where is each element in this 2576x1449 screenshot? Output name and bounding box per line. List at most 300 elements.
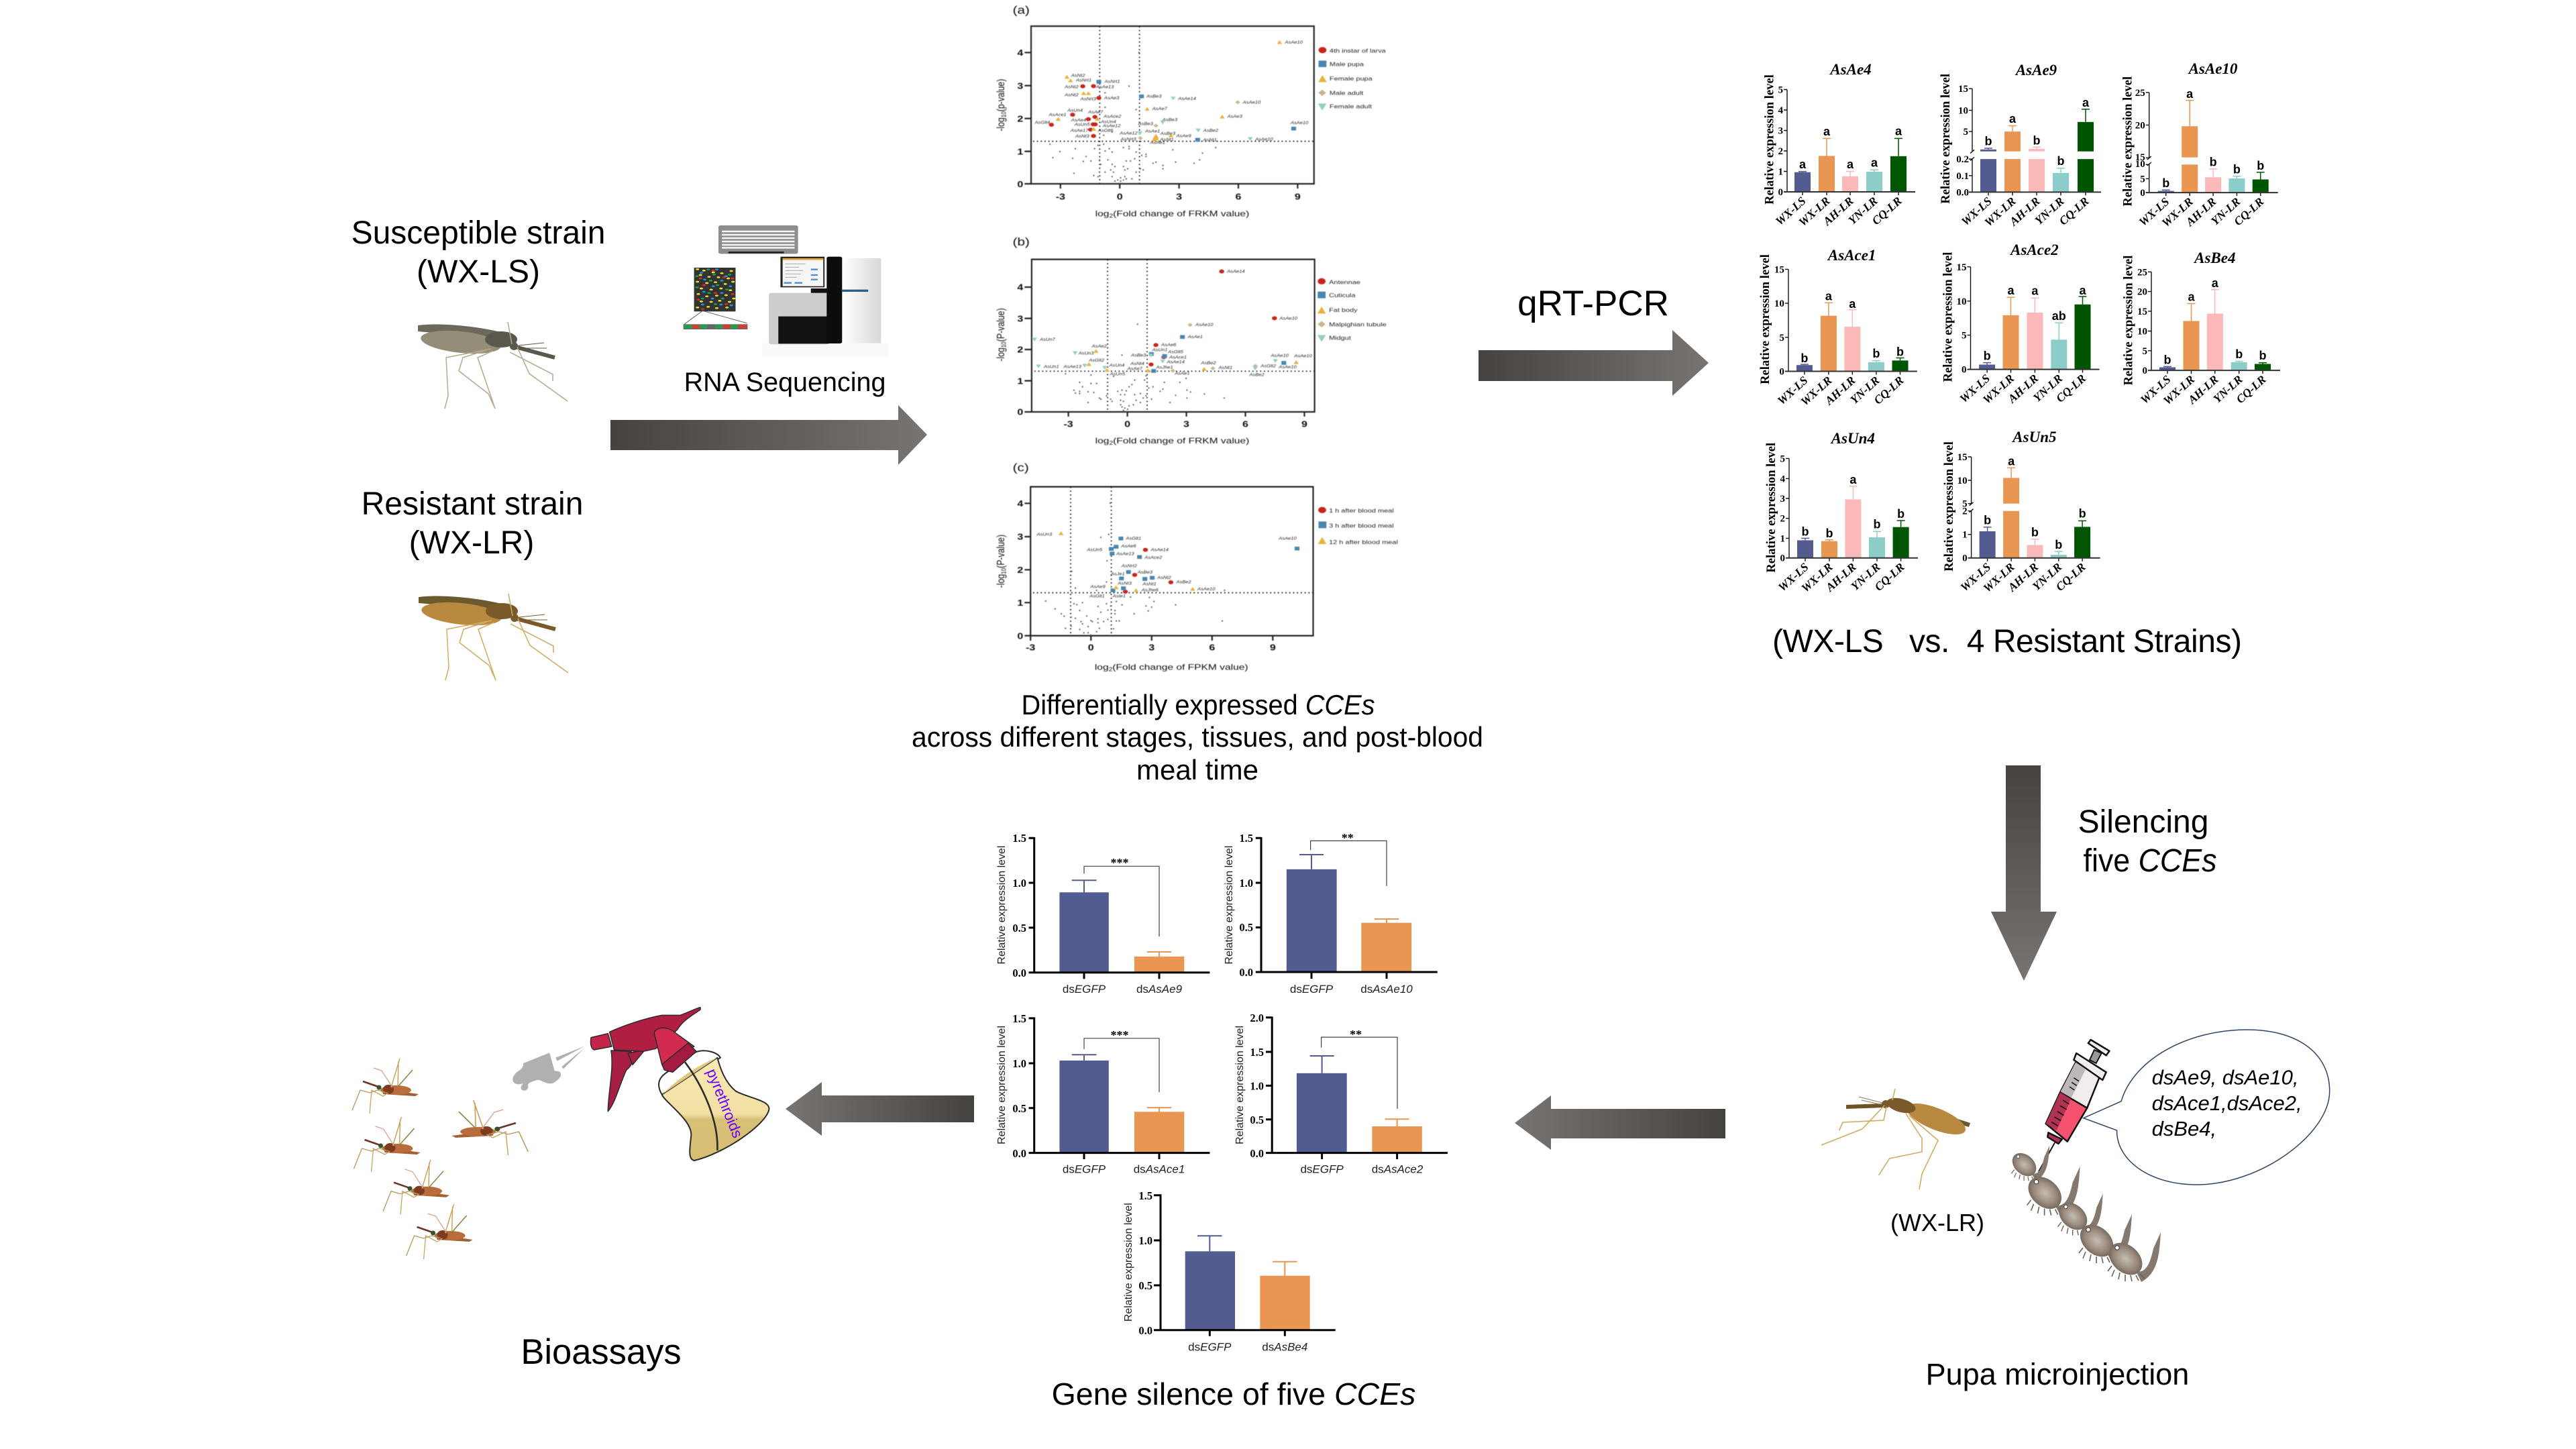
chart: AsUn5: AsUn5 [2011, 429, 2057, 445]
chart: AsUn5: WX-LR [1980, 560, 2017, 595]
label: gene silence of five CCEs: Gene silence of five CCEs [1052, 1377, 1415, 1411]
gene labels: AsAe13 [1116, 552, 1134, 556]
chart: AsUn4: AsUn4 [1830, 430, 1875, 447]
chart: AsUn5 [1942, 429, 2100, 595]
plot frame and axes: log [1095, 662, 1109, 672]
chart: AsAe10: AsAe10 [2188, 60, 2238, 77]
chart: AsAce1 [1758, 247, 1917, 409]
gene labels: AsNt2 [1064, 85, 1079, 89]
chart: AsUn5: Relative expression level [1942, 441, 1956, 572]
chart: AsUn5: 0 [1962, 553, 1968, 564]
chart: AsAe4: a [1823, 125, 1831, 138]
plot frame and axes: -3 [1026, 643, 1035, 653]
chart: dsAsBe4 silencing: dsEGFP [1188, 1340, 1232, 1353]
chart: AsAce1: a [1825, 290, 1833, 303]
chart: AsAce2: a [2031, 284, 2039, 298]
gene labels: AsNrt1 [1075, 78, 1091, 83]
chart: dsAsAce1 silencing [996, 1012, 1210, 1176]
chart: dsAsAce1 silencing: 0.5 [1012, 1102, 1026, 1115]
gene labels: AsNrt3 [1080, 97, 1096, 101]
gene labels [1034, 41, 1309, 145]
gene labels: AsAe9 [1175, 134, 1191, 138]
label: pupa microinjection: Pupa microinjection [1926, 1357, 2189, 1391]
chart: AsAce1: 10 [1774, 299, 1784, 309]
chart: AsAce2: 5 [1962, 331, 1967, 341]
heading: susceptible strain [352, 215, 605, 290]
chart: AsUn4: WX-LS [1776, 560, 1811, 594]
chart: AsAce1: 15 [1774, 264, 1784, 275]
gene labels: AsAe10 [1254, 138, 1273, 142]
chart: AsAe10: AH-LR [2183, 195, 2218, 229]
chart: AsBe4: 10 [2137, 326, 2147, 337]
chart: AsAe4: 3 [1778, 126, 1783, 137]
chart: AsAce2 [1941, 241, 2100, 407]
chart: AsAe4: AsAe4 [1829, 61, 1872, 78]
heading: susceptible strain: (WX-LS) [417, 254, 540, 290]
plot frame and axes: 3 [1183, 420, 1189, 429]
gene labels: AsGlt2 [1088, 359, 1104, 363]
gene labels: AsNrt2 [1121, 564, 1137, 568]
plot frame and axes [995, 26, 1314, 219]
gene labels: AsAe10 [1195, 323, 1214, 327]
chart: dsAsBe4 silencing: 0.5 [1138, 1279, 1152, 1292]
chart: AsAce2: AsAce2 [2009, 241, 2059, 258]
legend b: Malpighian tubule [1329, 322, 1387, 328]
legend c: 3 h after blood meal [1329, 523, 1394, 529]
plot frame and axes: 2 [1109, 440, 1113, 446]
plot frame and axes: 4 [1017, 499, 1023, 509]
arrow: microinjection to gene silence [1515, 1095, 1725, 1150]
gene labels: AsBe2 [1203, 129, 1218, 133]
gene labels: AsAe4 [1071, 119, 1086, 123]
chart: AsAe10: 0 [2140, 188, 2145, 199]
chart: AsAe4: 4 [1778, 105, 1783, 116]
heading: resistant strain: Resistant strain [362, 486, 583, 522]
gene labels: AsAe14 [1177, 97, 1196, 101]
chart: AsAce1: AsAce1 [1827, 247, 1876, 264]
plot frame and axes: 3 [1017, 533, 1023, 542]
chart: AsAe9: WX-LS [1959, 195, 1994, 228]
gene labels: AsAe13 [1095, 85, 1114, 89]
chart: dsAsBe4 silencing: 1.5 [1138, 1189, 1152, 1202]
gene labels: AsGlt1 [1125, 537, 1141, 541]
chart: AsAe9: 0.2 [1956, 154, 1969, 165]
chart: AsBe4: WX-LS [2138, 372, 2174, 407]
panel: volcano plot b: (b) [1013, 235, 1030, 248]
gene labels: AsAce1 [1048, 113, 1067, 117]
icon: syringe [2039, 1040, 2109, 1172]
chart: AsAe9: Relative expression level [1939, 74, 1953, 204]
chart: AsBe4: 20 [2137, 287, 2147, 298]
chart: dsAsAce1 silencing: Relative expression level [996, 1026, 1008, 1144]
chart: AsAe4: Relative expression level [1763, 74, 1776, 205]
heading: qRT-PCR: qRT-PCR [1517, 284, 1669, 323]
gene labels: AsBe2 [1200, 362, 1216, 366]
chart: AsAe10: YN-LR [2208, 195, 2243, 228]
chart: AsAe4: 2 [1778, 146, 1783, 157]
gene labels: AsNt2 [1157, 576, 1171, 580]
gene labels: AsAe1 [1187, 335, 1203, 339]
chart: dsAsAe10 silencing: 0.5 [1239, 921, 1253, 934]
gene labels: AsBe3 [1137, 122, 1153, 126]
arrow: strains to RNA-seq [610, 405, 927, 465]
chart: AsAe10: b [2210, 155, 2217, 168]
icon: row of pupae [2008, 1146, 2161, 1282]
gene labels: AsUn1 [1151, 348, 1168, 352]
chart: AsUn4: 4 [1780, 474, 1786, 484]
chart: AsAe10: WX-LS [2136, 195, 2171, 229]
text: injected dsRNA list: dsBe4, [2152, 1117, 2216, 1140]
chart: AsBe4: WX-LR [2161, 372, 2197, 407]
plot frame and axes: 0 [1088, 643, 1094, 653]
chart: AsAe9: AH-LR [2006, 195, 2043, 229]
caption: WX-LS vs 4 resistant strains: (WX-LS vs. 4 Resistant Strains) [1772, 624, 2242, 659]
icon: brown resistant mosquito [419, 594, 568, 680]
plot frame and axes: -3 [1063, 420, 1073, 429]
icon: WX-LR mosquito for injection [1821, 1089, 1970, 1189]
gene labels: AsGlt1 [1089, 594, 1105, 598]
chart: AsUn4: CQ-LR [1872, 560, 1907, 594]
chart: AsUn5: b [2031, 525, 2039, 539]
chart: AsUn5: AH-LR [2004, 560, 2041, 594]
gene labels: AsAe1 [1150, 141, 1165, 145]
plot frame and axes: 3 [1017, 82, 1023, 91]
chart: dsAsAe10 silencing: ** [1342, 831, 1354, 845]
gene labels: AsNt2 [1071, 74, 1085, 78]
gene labels: AsAe10 [1270, 354, 1289, 358]
gene labels: AsAe6 [1161, 343, 1177, 347]
gene labels: AsAce2 [1103, 115, 1122, 119]
chart: AsUn5: 5 [1962, 499, 1968, 510]
chart: AsAce2: 0 [1962, 365, 1967, 376]
text: injected dsRNA list [2152, 1066, 2302, 1140]
gene labels: AsAe12 [1119, 131, 1138, 136]
chart: AsUn5: b [1984, 514, 1991, 527]
chart: dsAsAe10 silencing: 0.0 [1239, 966, 1253, 979]
gene labels: AsBe3 [1130, 354, 1146, 358]
chart: AsUn4: b [1873, 517, 1881, 531]
chart: dsAsAce1 silencing: dsAsAce1 [1134, 1163, 1185, 1176]
plot frame and axes [995, 260, 1315, 446]
gene labels: AsUn4 [1100, 120, 1116, 124]
chart: AsUn5: 1 [1962, 530, 1968, 541]
plot frame and axes [995, 487, 1313, 672]
gene labels: AsAe14 [1150, 548, 1169, 552]
chart: dsAsAce1 silencing: 1.5 [1012, 1012, 1026, 1025]
chart: AsUn5: b [2055, 538, 2062, 551]
gene labels: AsAe10 [1284, 41, 1303, 45]
gene labels: AsAe10 [1278, 366, 1297, 370]
chart: AsUn5: 10 [1957, 476, 1968, 486]
label: Bioassays: Bioassays [521, 1332, 682, 1372]
gene labels [1039, 270, 1312, 377]
label: WX-LR: (WX-LR) [1890, 1209, 1984, 1236]
chart: AsAce2: 15 [1956, 262, 1967, 273]
chart: AsAe4: WX-LS [1773, 194, 1809, 228]
gene labels: AsAce1 [1169, 356, 1187, 360]
chart: AsBe4: b [2259, 349, 2266, 362]
chart: dsAsBe4 silencing: 1.0 [1138, 1234, 1152, 1247]
chart: AsAe9: AsAe9 [2015, 62, 2057, 78]
chart: AsAe10: b [2257, 159, 2264, 172]
chart: dsAsBe4 silencing: Relative expression level [1123, 1203, 1134, 1322]
gene labels: AsNt3 [1117, 582, 1132, 586]
chart: dsAsAe10 silencing: dsEGFP [1290, 983, 1334, 996]
legend a: Male adult [1330, 91, 1364, 97]
panel: volcano plot c [995, 462, 1398, 672]
caption: differentially expressed CCEs: Differentially expressed CCEs [1021, 689, 1375, 720]
chart: AsBe4: AH-LR [2185, 372, 2221, 407]
plot frame and axes: 0 [1017, 180, 1023, 189]
plot frame and axes: 2 [1017, 566, 1023, 575]
chart: AsAce2: WX-LS [1957, 372, 1992, 405]
caption: differentially expressed CCEs: meal time [1136, 754, 1258, 786]
chart: dsAsAe9 silencing: 0.0 [1012, 967, 1026, 979]
chart: AsBe4: AsBe4 [2193, 250, 2235, 266]
chart: AsAce1: b [1801, 352, 1808, 365]
plot frame and axes: (P-value) [995, 308, 1006, 341]
plot frame and axes: 10 [1000, 111, 1008, 117]
plot frame and axes: (Fold change of FPKM value) [1112, 662, 1248, 672]
gene labels: AsBe3 [1146, 95, 1162, 99]
chart: AsAce1: WX-LR [1798, 374, 1835, 409]
plot frame and axes: (P-value) [995, 535, 1006, 568]
legend a: Male pupa [1330, 61, 1364, 68]
plot frame and axes: 6 [1236, 193, 1241, 202]
chart: AsAce1: b [1896, 345, 1904, 358]
chart: dsAsAe10 silencing: Relative expression level [1224, 846, 1235, 964]
markers [1059, 531, 1297, 592]
chart: AsAce1: CQ-LR [1871, 374, 1907, 407]
legend c: 1 h after blood meal [1329, 508, 1394, 515]
chart: AsAe9 [1939, 62, 2101, 229]
chart: AsAe4: YN-LR [1845, 194, 1880, 227]
gene labels: AsUn5 [1074, 123, 1090, 127]
chart: dsAsAce1 silencing: 1.0 [1012, 1057, 1026, 1070]
chart: AsAce1: a [1849, 297, 1856, 311]
chart: AsUn4: Relative expression level [1764, 443, 1778, 573]
chart: dsAsAe9 silencing [996, 832, 1210, 996]
chart: AsAe10: a [2186, 87, 2194, 101]
legend a: 4th instar of larva [1330, 48, 1386, 54]
chart: dsAsAce2 silencing: Relative expression level [1234, 1026, 1246, 1144]
plot frame and axes: 0 [1017, 408, 1023, 417]
legend a: Female adult [1330, 104, 1372, 110]
chart: AsAe9: b [2033, 133, 2041, 147]
gene labels: AsGlt2 [1260, 364, 1276, 368]
plot frame and axes: 4 [1017, 48, 1023, 58]
chart: AsBe4: a [2188, 290, 2195, 303]
chart: dsAsAce2 silencing: 1.5 [1250, 1046, 1264, 1059]
chart: AsUn4: 1 [1780, 533, 1785, 544]
plot frame and axes: 1 [1017, 377, 1023, 386]
gene labels: AsAe13 [1063, 365, 1081, 369]
plot frame and axes: 10 [1000, 568, 1008, 574]
gene labels: AsAe10 [1293, 354, 1312, 358]
chart: AsAe4: 0 [1778, 187, 1783, 198]
chart: AsAce1: 0 [1779, 366, 1784, 377]
gene labels: AsUn3 [1078, 352, 1094, 356]
plot frame and axes: 6 [1209, 643, 1215, 653]
chart: dsAsAce2 silencing [1234, 1012, 1448, 1176]
chart: AsAe10: 25 [2135, 88, 2145, 99]
gene labels: AsNt2 [1064, 93, 1079, 97]
chart: AsUn4: 3 [1780, 494, 1785, 504]
plot frame and axes: 0 [1124, 420, 1130, 429]
label: silencing five CCEs: five CCEs [2084, 843, 2216, 879]
chart: AsUn5: a [2008, 455, 2015, 468]
chart: AsAe9: 10 [1958, 105, 1968, 116]
chart: AsUn4: YN-LR [1848, 560, 1883, 593]
chart: AsAce2: WX-LR [1980, 372, 2017, 407]
gene labels [1036, 533, 1297, 598]
chart: dsAsAe9 silencing: 0.5 [1012, 922, 1026, 934]
chart: dsAsBe4 silencing [1123, 1189, 1336, 1353]
scatter points [1046, 503, 1224, 635]
chart: dsAsAe9 silencing: 1.0 [1012, 877, 1026, 890]
plot frame and axes: 3 [1176, 193, 1182, 202]
chart: AsAe9: b [2057, 154, 2065, 168]
chart: AsAe4: 1 [1778, 166, 1783, 177]
chart: AsUn4: 2 [1780, 514, 1785, 525]
chart: AsAce2: Relative expression level [1941, 252, 1955, 382]
gene labels: AsBe3 [1162, 118, 1177, 122]
icon: spray cloud [513, 1046, 585, 1091]
chart: AsBe4: b [2235, 347, 2243, 361]
chart: AsBe4: Relative expression level [2122, 256, 2136, 385]
chart: AsAe4: 5 [1778, 85, 1783, 95]
chart: AsBe4: 25 [2137, 267, 2147, 278]
gene labels: AsAce2 [1144, 556, 1163, 560]
gene labels: AsAe1 [1144, 129, 1161, 133]
plot frame and axes: 2 [1109, 213, 1113, 219]
plot frame and axes: (Fold change of FRKM value) [1113, 436, 1249, 445]
chart: dsAsAce2 silencing: 0.0 [1250, 1147, 1264, 1160]
icon: five test mosquitoes [352, 1059, 528, 1259]
chart: AsAe10: b [2162, 176, 2169, 190]
label: pyrethroids: pyrethroids [703, 1067, 746, 1140]
gene labels: AsNrt3 [1120, 138, 1136, 142]
gene labels: AsBe2 [1248, 373, 1265, 377]
gene labels: AsUn3 [1036, 533, 1052, 537]
icon: grey susceptible mosquito [418, 322, 568, 409]
gene labels: AsNt1 [1159, 138, 1174, 142]
chart: dsAsAe9 silencing: dsEGFP [1063, 983, 1106, 996]
gene labels: AsGlt6 [1097, 129, 1114, 133]
chart: AsAe9: 15 [1958, 84, 1968, 95]
legend c [1318, 507, 1398, 546]
chart: AsAe4: WX-LR [1796, 194, 1833, 229]
chart: AsAe4: a [1799, 158, 1807, 171]
heading: susceptible strain: Susceptible strain [352, 215, 605, 251]
plot frame and axes: 1 [1017, 598, 1023, 608]
chart: AsBe4: 0 [2143, 366, 2147, 376]
plot frame and axes: 3 [1017, 315, 1023, 324]
chart: AsUn5: 15 [1957, 452, 1968, 463]
panel: volcano plot c: (c) [1013, 462, 1029, 474]
plot frame and axes: 2 [1109, 666, 1112, 672]
scatter points [1065, 324, 1224, 411]
chart: AsBe4: a [2212, 276, 2219, 290]
legend c: 12 h after blood meal [1329, 539, 1398, 546]
chart: dsAsAce1 silencing: *** [1111, 1028, 1128, 1042]
chart: AsUn4: 0 [1780, 553, 1785, 564]
chart: AsAe10: 5 [2140, 174, 2145, 184]
plot frame and axes: 3 [1148, 643, 1155, 653]
chart: AsBe4: 5 [2143, 346, 2147, 357]
arrow: to qRT-PCR charts [1479, 330, 1709, 396]
chart: dsAsAe10 silencing: dsAsAe10 [1360, 983, 1413, 996]
gene labels: AsNt1 [1202, 138, 1217, 142]
chart: AsAce2: 10 [1956, 297, 1967, 307]
gene labels: AsNt4 [1130, 362, 1144, 366]
arrow: gene silence to bioassays [786, 1082, 974, 1136]
gene labels: AsAe3 [1104, 97, 1120, 101]
chart: AsUn4: WX-LR [1799, 560, 1835, 595]
chart: AsBe4: YN-LR [2210, 372, 2245, 406]
gene labels: AsAe7 [1087, 111, 1104, 115]
gene labels: AsUn4 [1067, 109, 1083, 113]
gene labels: AsGlt4 [1034, 121, 1050, 125]
plot frame and axes: 4 [1017, 283, 1023, 292]
plot frame and axes: 9 [1295, 193, 1301, 202]
gene labels: AsBe3 [1137, 571, 1152, 575]
gene labels: AsIe1 [1112, 594, 1126, 598]
chart: dsAsAce2 silencing: dsAsAce2 [1372, 1163, 1424, 1176]
chart: AsUn4: AH-LR [1823, 560, 1859, 594]
chart: AsAe9: a [2009, 112, 2017, 125]
chart: dsAsAce2 silencing: 2.0 [1250, 1012, 1264, 1024]
plot frame and axes: (p-value) [995, 79, 1006, 111]
scatter points [1050, 52, 1216, 183]
legend b [1318, 278, 1387, 342]
legend a: Female pupa [1330, 76, 1373, 83]
gene labels: AsAe10 [1278, 537, 1297, 541]
heading: resistant strain [362, 486, 583, 561]
chart: AsAe9: 5 [1963, 127, 1968, 138]
gene labels: AsNt3 [1075, 135, 1089, 139]
chart: AsAce1: Relative expression level [1758, 254, 1772, 384]
plot frame and axes: log [1095, 209, 1109, 218]
legend b: Midgut [1329, 335, 1351, 341]
gene labels: AsNt1 [1142, 582, 1157, 586]
panel: volcano plot a [995, 4, 1386, 219]
gene labels: AsNt1 [1218, 366, 1232, 370]
gene labels: AsUn4 [1109, 364, 1125, 368]
chart: AsAe10: 20 [2135, 120, 2145, 131]
plot frame and axes: -log [995, 574, 1006, 588]
gene labels: AsAe14 [1226, 270, 1245, 274]
chart: dsAsBe4 silencing: dsAsBe4 [1262, 1340, 1307, 1353]
chart: AsAe10: b [2233, 163, 2241, 176]
plot frame and axes: 1 [1017, 148, 1023, 157]
chart: AsUn4: b [1802, 525, 1809, 538]
chart: AsAce1: 5 [1779, 333, 1784, 343]
chart: AsAce2: CQ-LR [2053, 372, 2088, 405]
plot frame and axes: log [1095, 436, 1109, 445]
chart: AsAe4: CQ-LR [1869, 194, 1904, 227]
chart: AsAe9: YN-LR [2032, 195, 2067, 227]
gene labels: AsAe12 [1102, 124, 1121, 128]
chart: AsUn4: b [1897, 507, 1904, 521]
legend b: Fat body [1329, 307, 1358, 314]
chart: AsBe4 [2122, 250, 2280, 407]
chart: AsUn5: CQ-LR [2053, 560, 2088, 594]
gene labels: AsAe10 [1290, 121, 1309, 125]
chart: AsAce1: b [1872, 347, 1880, 360]
chart: dsAsAce1 silencing: 0.0 [1012, 1147, 1026, 1160]
chart: AsAe4: a [1871, 156, 1878, 169]
